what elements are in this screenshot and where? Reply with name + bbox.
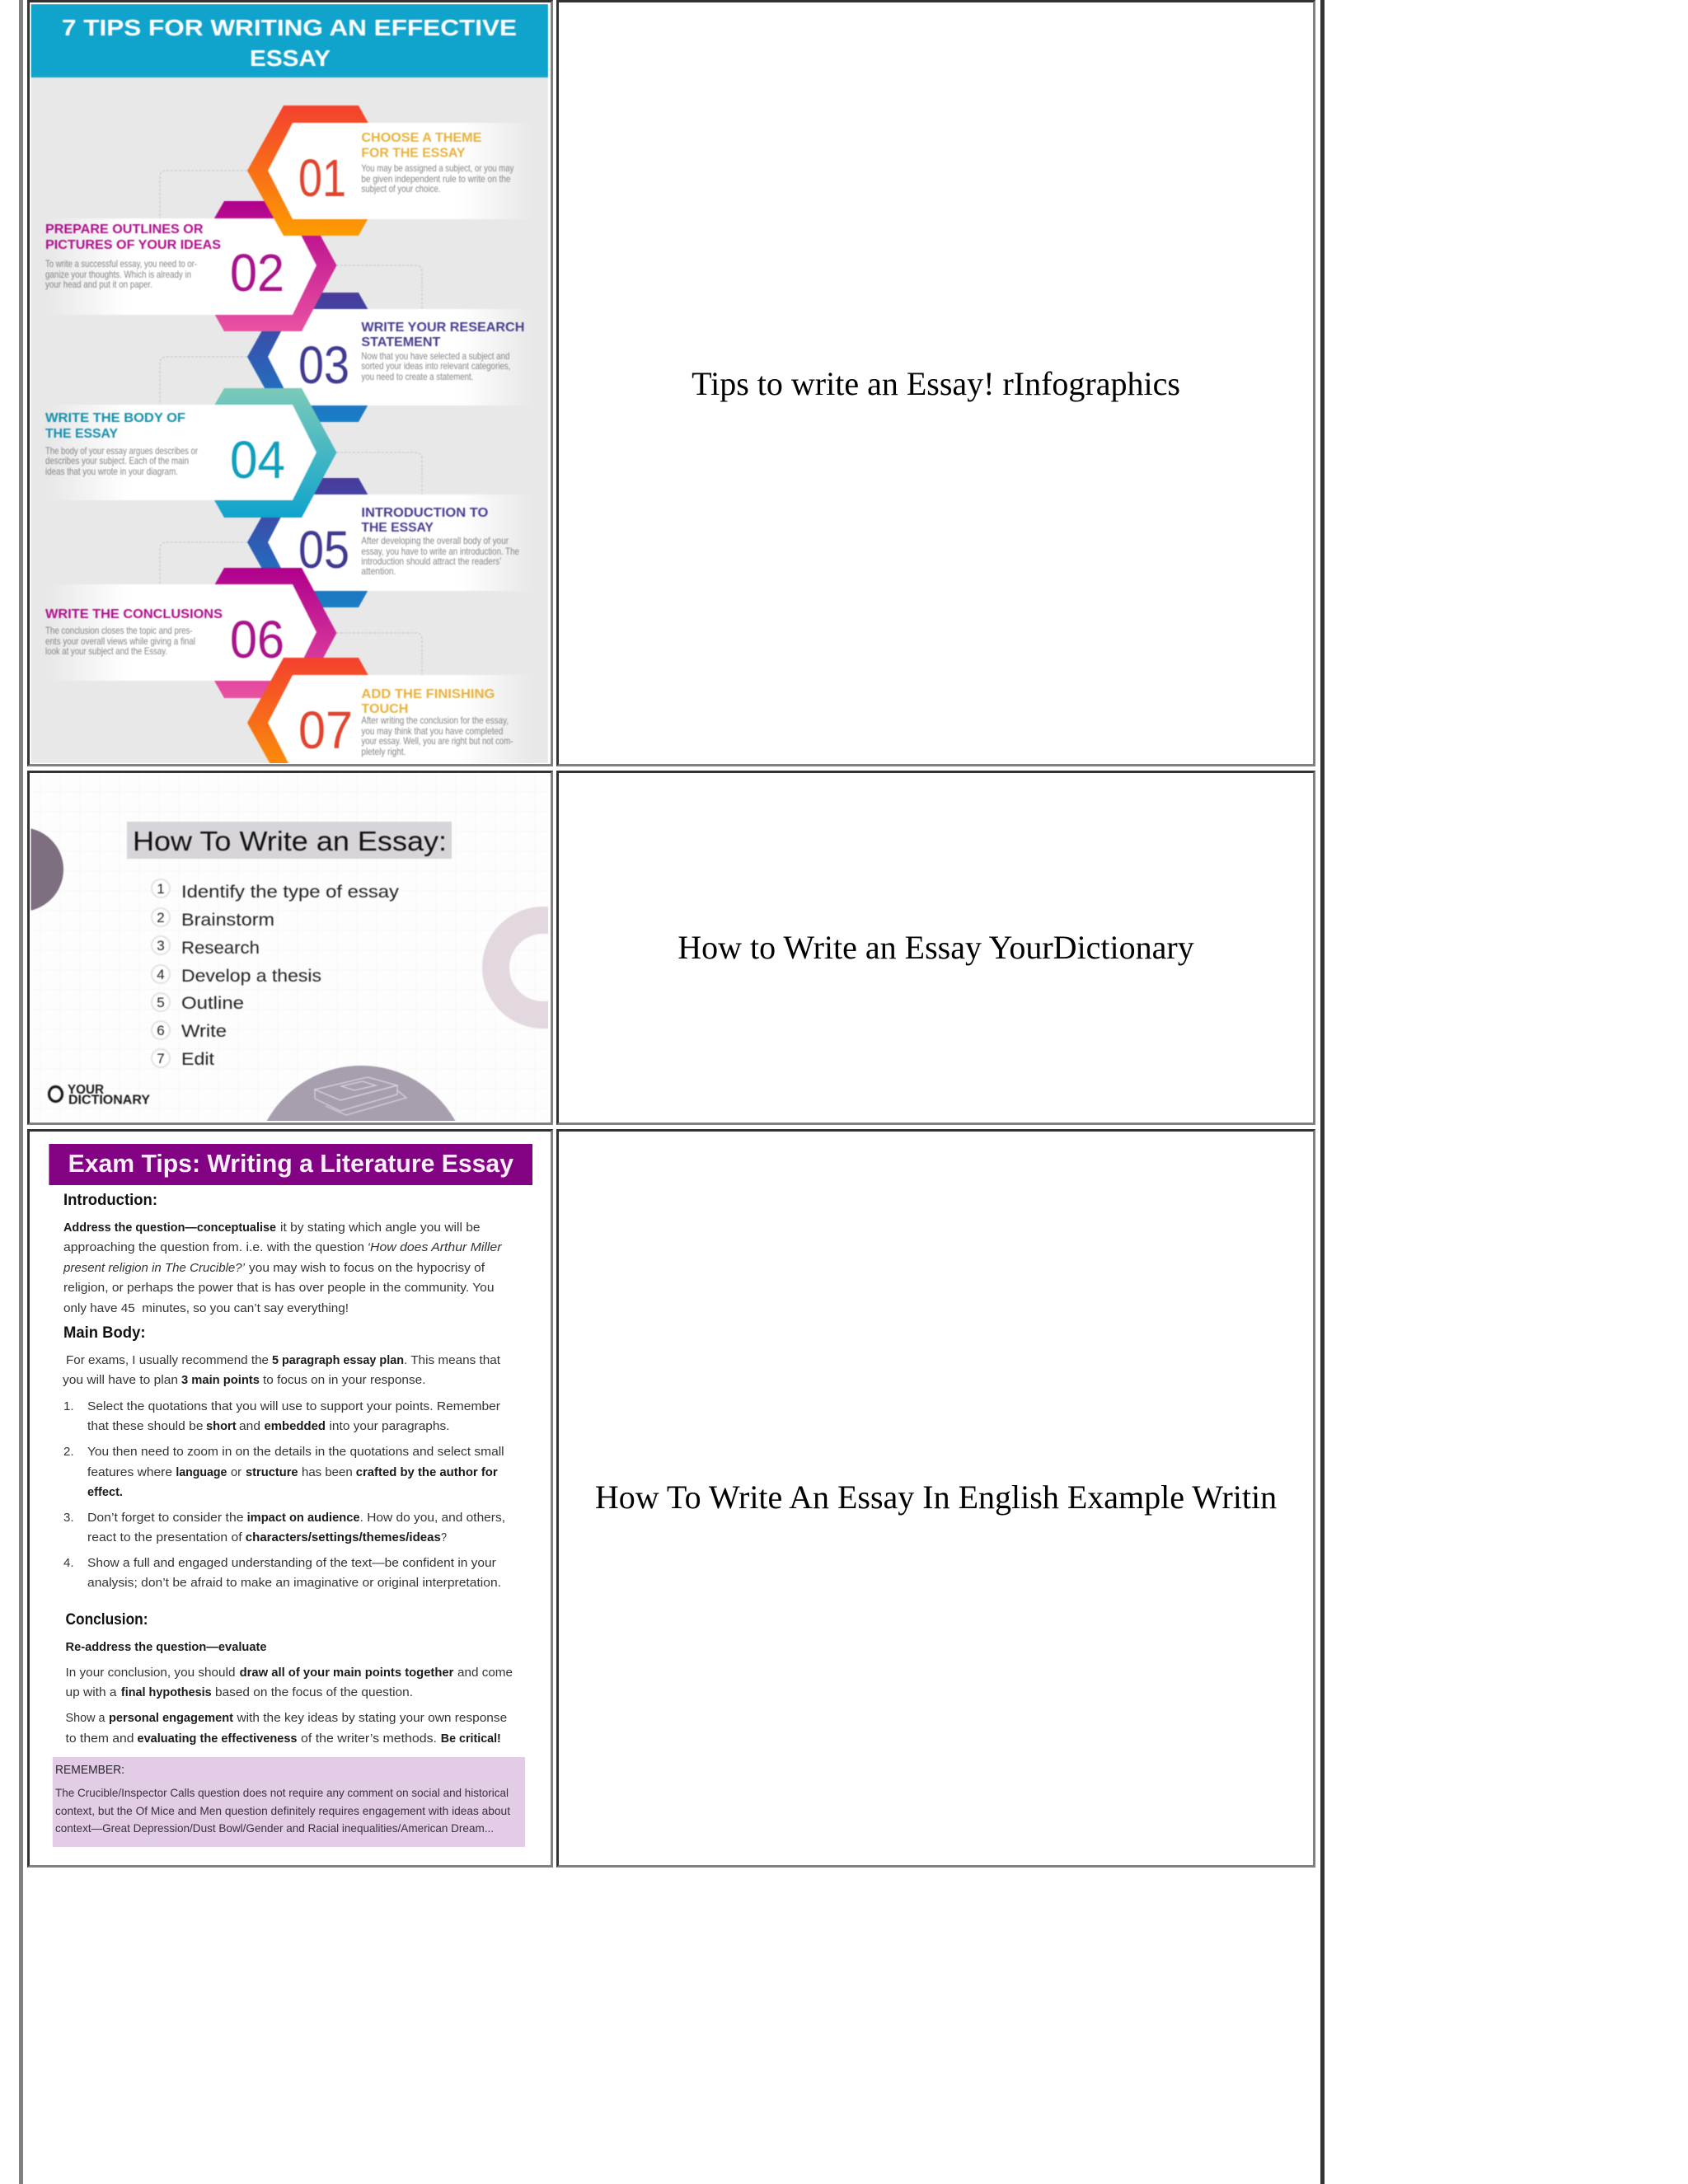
step 02 hexagon — [48, 201, 336, 331]
list item 4: 4. — [63, 1556, 74, 1570]
step 03 text: sorted your ideas into relevant categories, — [361, 360, 510, 372]
list item 4 — [63, 1556, 501, 1590]
section: conclusion: draw all of your main points together — [240, 1666, 454, 1680]
list item 1: embedded — [264, 1419, 326, 1433]
section: conclusion: with the key ideas by stating your own response — [236, 1711, 507, 1725]
step 01 text: subject of your choice. — [361, 183, 440, 194]
list item 2 — [63, 1445, 504, 1499]
list item 1: that these should be — [87, 1419, 203, 1433]
numbered list: 7 — [157, 1051, 165, 1066]
cell: row 2 caption — [556, 771, 1315, 1125]
section: main body — [63, 1324, 501, 1387]
section: conclusion: final hypothesis — [121, 1685, 212, 1699]
list item 3: Don’t forget to consider the — [87, 1511, 244, 1525]
list item 1: into your paragraphs. — [330, 1419, 450, 1433]
step 04 text: 04 — [230, 430, 285, 490]
section: introduction: you may wish to focus on the hypocrisy of — [249, 1261, 485, 1275]
caption: row 1: Tips to write an Essay! rInfographics — [692, 365, 1180, 402]
title: ESSAY — [250, 45, 331, 71]
panel: 7 tips for writing an effective essay — [31, 4, 548, 788]
step 03 text: STATEMENT — [361, 335, 441, 349]
step 03 text: 03 — [298, 335, 349, 395]
step 05 text — [298, 506, 519, 579]
section: introduction: present religion in The Crucible?’ — [63, 1261, 246, 1275]
step 07 text: ADD THE FINISHING — [361, 687, 495, 701]
caption: row 3: How To Write An Essay In English Example Writin — [595, 1479, 1277, 1516]
cell: row 1 caption — [556, 0, 1315, 766]
section: conclusion: Show a — [66, 1711, 106, 1725]
numbered list: Develop a thesis — [181, 967, 321, 986]
list item 2: has been — [302, 1465, 353, 1479]
step 03 text: you need to create a statement. — [361, 371, 473, 382]
list item 1: short — [206, 1419, 237, 1433]
logo: YourDictionary: DICTIONARY — [68, 1093, 150, 1108]
step 05 text: essay, you have to write an introduction. The — [361, 546, 519, 557]
list item 2: or — [231, 1465, 241, 1479]
list item 1: 1. — [63, 1399, 74, 1413]
step 04 text: The body of your essay argues describes or — [45, 445, 198, 457]
numbered list: Write — [181, 1022, 227, 1041]
step 02 text: your head and put it on paper. — [45, 279, 152, 290]
step 06 text — [45, 608, 284, 659]
section: conclusion: of the writer’s methods. — [301, 1732, 437, 1746]
callout: remember: The Crucible/Inspector Calls question does not require any comment on social and historical — [55, 1786, 509, 1799]
infographic images — [31, 4, 548, 1847]
callout: remember: REMEMBER: — [55, 1763, 124, 1777]
panel: how to write an essay — [31, 791, 548, 1121]
step 05 text: introduction should attract the readers’ — [361, 555, 501, 567]
step 02 text: PICTURES OF YOUR IDEAS — [45, 238, 221, 252]
cell: row 3 image — [27, 1129, 553, 1868]
list item 4: Show a full and engaged understanding of the text—be confident in your — [87, 1556, 496, 1570]
decorative half circle left — [31, 827, 64, 912]
section: conclusion — [66, 1611, 513, 1746]
step 07 hexagon — [246, 657, 506, 763]
section: conclusion: up with a — [66, 1685, 117, 1699]
list item 1 — [63, 1399, 500, 1433]
section: introduction: approaching the question from. i.e. with the question — [63, 1240, 364, 1254]
section: conclusion: Conclusion: — [66, 1611, 148, 1629]
list item 3: characters/settings/themes/ideas — [246, 1530, 441, 1544]
numbered list: 3 — [157, 938, 165, 954]
step 07 text — [298, 687, 513, 760]
step 07 text: After writing the conclusion for the essay, — [361, 715, 509, 726]
list item 3: ? — [441, 1530, 447, 1544]
step 06 text: The conclusion closes the topic and pres- — [45, 625, 193, 636]
numbered list: Brainstorm — [181, 911, 274, 930]
numbered list: 6 — [157, 1023, 165, 1038]
section: conclusion: In your conclusion, you should — [66, 1666, 236, 1680]
step 01 text: 01 — [298, 148, 346, 208]
step 02 text: 02 — [230, 243, 284, 302]
section: conclusion: based on the focus of the question. — [215, 1685, 413, 1699]
step 04 text: describes your subject. Each of the main — [45, 455, 189, 466]
section: conclusion: and come — [457, 1666, 513, 1680]
numbered list — [152, 879, 400, 1069]
list item 1: Select the quotations that you will use to support your points. Remember — [87, 1399, 500, 1413]
list item 2: crafted by the author for — [356, 1465, 498, 1479]
list item 3: react to the presentation of — [87, 1530, 243, 1544]
step 01 text — [299, 132, 514, 198]
callout: remember: context, but the Of Mice and Men question definitely requires engagement with ideas about — [55, 1804, 510, 1817]
section: introduction: only have 45 minutes, so you can’t say everything! — [63, 1301, 349, 1315]
step 06 text: look at your subject and the Essay. — [45, 645, 167, 657]
list item 3: 3. — [63, 1511, 74, 1525]
logo: YourDictionary — [47, 1084, 150, 1104]
step 05 text: attention. — [361, 565, 396, 577]
step 06 hexagon — [48, 568, 336, 698]
section: introduction: Address the question—conceptualise — [63, 1221, 276, 1235]
list item 3: . How do you, and others, — [360, 1511, 505, 1525]
step 04 text: ideas that you wrote in your diagram. — [45, 466, 178, 477]
numbered list: 2 — [157, 910, 165, 926]
step 07 text: pletely right. — [361, 746, 406, 757]
title bar — [49, 1144, 532, 1185]
panel: exam tips literature essay — [49, 1144, 532, 1847]
step 04 text: THE ESSAY — [45, 427, 118, 441]
step 01 text: FOR THE ESSAY — [361, 147, 466, 160]
step 05 text: INTRODUCTION TO — [361, 506, 488, 520]
step 07 text: 07 — [298, 701, 353, 760]
logo: YourDictionary: YOUR — [68, 1083, 104, 1097]
step 06 text: 06 — [230, 610, 284, 669]
section: conclusion: Re-address the question—evaluate — [66, 1640, 267, 1654]
callout: remember: context—Great Depression/Dust Bowl/Gender and Racial inequalities/American Dream... — [55, 1821, 494, 1835]
decorative dome with books icon — [266, 1065, 456, 1121]
dashed connectors — [160, 171, 422, 675]
numbered list: Identify the type of essay — [181, 883, 400, 902]
list item 1: and — [239, 1419, 260, 1433]
section: main body: 5 paragraph essay plan — [272, 1353, 404, 1367]
title bar: Exam Tips: Writing a Literature Essay — [68, 1149, 514, 1178]
section: introduction: religion, or perhaps the power that is has over people in the community. You — [63, 1281, 495, 1295]
step 03 hexagon — [247, 293, 533, 422]
step 07 text: you may think that you have completed — [361, 725, 503, 737]
list item 4: analysis; don’t be afraid to make an imaginative or original interpretation. — [87, 1576, 501, 1590]
step 06 text: WRITE THE CONCLUSIONS — [45, 607, 223, 621]
decorative ring right — [496, 920, 590, 1015]
section: introduction — [63, 1192, 503, 1315]
section: main body: Main Body: — [63, 1324, 145, 1342]
list item 2: structure — [246, 1465, 298, 1479]
numbered list: Edit — [181, 1050, 214, 1069]
caption: row 2: How to Write an Essay YourDictionary — [678, 928, 1194, 966]
step 06 text: ents your overall views while giving a final — [45, 635, 195, 647]
step 04 text: WRITE THE BODY OF — [45, 411, 185, 425]
numbered list: Research — [181, 939, 260, 958]
step 03 text — [299, 321, 524, 384]
step 01 text: CHOOSE A THEME — [361, 131, 482, 145]
numbered list: 5 — [157, 995, 165, 1010]
title bar — [31, 4, 548, 77]
list item 2: You then need to zoom in on the details in the quotations and select small — [87, 1445, 504, 1459]
numbered list: 1 — [157, 881, 165, 897]
heading: How To Write an Essay: — [133, 826, 447, 856]
step 05 text: THE ESSAY — [361, 521, 434, 535]
section: main body: to focus on in your response. — [263, 1373, 425, 1387]
step 05 text: After developing the overall body of your — [361, 535, 509, 546]
step 02 text — [45, 223, 283, 292]
step 02 text: ganize your thoughts. Which is already in — [45, 269, 191, 280]
numbered list: Outline — [181, 994, 244, 1013]
step 07 text: your essay. Well, you are right but not com- — [361, 735, 513, 747]
section: main body: you will have to plan — [63, 1373, 178, 1387]
list item 2: features where — [87, 1465, 172, 1479]
list item 2: 2. — [63, 1445, 74, 1459]
step 01 text: be given independent rule to write on the — [361, 173, 511, 185]
section: conclusion: Be critical! — [441, 1732, 501, 1746]
step 02 text: To write a successful essay, you need to or- — [45, 258, 197, 269]
list item 2: language — [176, 1465, 227, 1479]
section: main body: 3 main points — [181, 1373, 260, 1387]
section: conclusion: personal engagement — [109, 1711, 233, 1725]
list item 3: impact on audience — [247, 1511, 360, 1525]
section: conclusion: evaluating the effectiveness — [137, 1732, 297, 1746]
step 03 text: Now that you have selected a subject and — [361, 350, 509, 362]
outer table right border — [1320, 0, 1325, 2184]
step 07 text: TOUCH — [361, 702, 408, 716]
step 04 text — [45, 412, 285, 480]
step 03 text: WRITE YOUR RESEARCH — [361, 321, 524, 335]
section: conclusion: to them and — [66, 1732, 134, 1746]
grid background — [40, 791, 534, 1108]
outer table left border — [19, 0, 23, 2184]
step 04 hexagon — [48, 388, 336, 518]
step 05 text: 05 — [298, 520, 349, 579]
list item 2: effect. — [87, 1485, 123, 1499]
cell: row 3 caption — [556, 1129, 1315, 1868]
section: main body: For exams, I usually recommend the — [66, 1353, 269, 1367]
step 01 text: You may be assigned a subject, or you may — [361, 162, 513, 174]
step 05 hexagon — [247, 478, 533, 607]
callout: remember — [53, 1757, 525, 1847]
title — [63, 18, 517, 68]
section: introduction: it by stating which angle you will be — [280, 1221, 481, 1235]
step 01 hexagon — [247, 105, 533, 236]
section: introduction: ‘How does Arthur Miller — [368, 1240, 503, 1254]
title: 7 TIPS FOR WRITING AN EFFECTIVE — [62, 15, 517, 40]
cell: row 2 image — [27, 771, 553, 1125]
cell: row 1 image — [27, 0, 553, 766]
section: introduction: Introduction: — [63, 1192, 157, 1209]
section: main body: . This means that — [404, 1353, 501, 1367]
list item 3 — [63, 1511, 505, 1544]
panel background — [31, 4, 548, 763]
numbered list: 4 — [157, 967, 165, 982]
step 02 text: PREPARE OUTLINES OR — [45, 223, 204, 237]
